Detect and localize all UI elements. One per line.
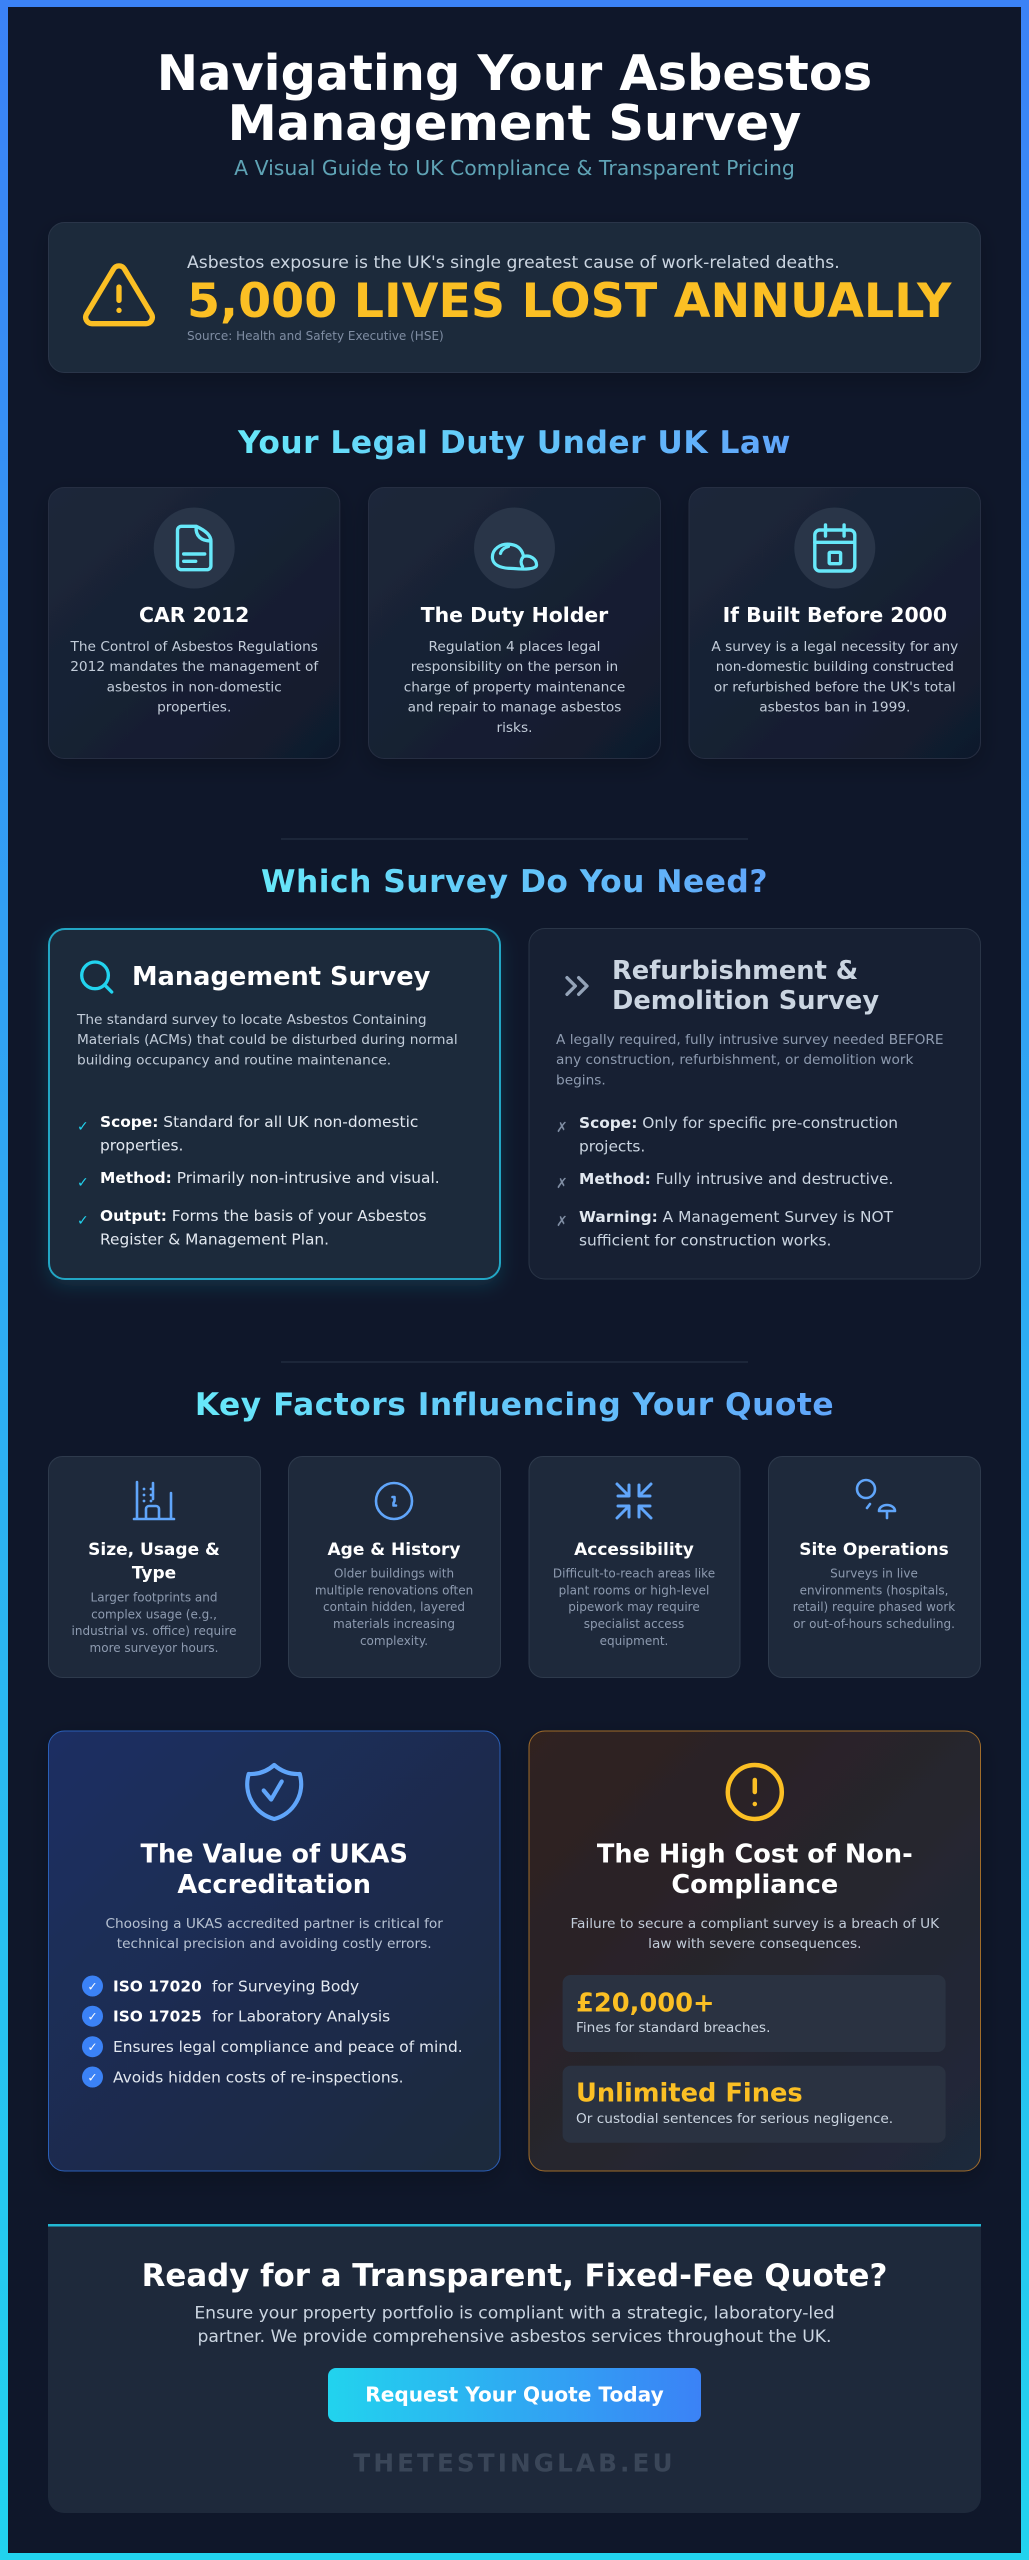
survey feature list: projects. [579,1138,645,1156]
panel: age history [288,1456,500,1678]
card text: or refurbished before the UK's total [714,680,956,696]
card heading: If Built Before 2000 [723,603,947,627]
icon: clock info [376,1483,412,1519]
CTA heading: Ready for a Transparent, Fixed-Fee Quote? [142,2258,887,2294]
panel: alert statistic [48,222,980,372]
factor text [553,1566,715,1648]
card text: asbestos in non-domestic [107,680,282,696]
icon: document [154,508,235,588]
card text: properties. [157,700,231,716]
survey feature list: Scope: Standard for all UK non-domestic [100,1113,418,1131]
CTA text: Ensure your property portfolio is compliant with a strategic, laboratory-led [194,2303,835,2323]
survey feature list: ✓ [77,1213,89,1229]
card text: responsibility on the person in [411,659,618,675]
factor text: or out-of-hours scheduling. [793,1617,955,1631]
panel: size usage type [48,1456,260,1678]
factor text [793,1566,955,1631]
panel text: technical precision and avoiding costly errors. [117,1936,432,1952]
panel heading: Compliance [671,1870,838,1900]
factor text: contain hidden, layered [323,1600,465,1614]
panel text: law with severe consequences. [648,1936,861,1952]
panel heading: The High Cost of Non- [597,1840,913,1870]
icon: inward arrows [617,1484,651,1518]
accreditation checklist: ✓ [87,2010,98,2024]
factor heading: Age & History [328,1540,460,1560]
panel heading [597,1840,913,1900]
panel: accessibility [529,1456,740,1678]
survey description: The standard survey to locate Asbestos Containing [76,1012,427,1028]
survey feature list: properties. [100,1136,183,1154]
title: Management Survey [228,94,801,152]
survey description: building occupancy and routine maintenance. [77,1052,391,1068]
card heading: CAR 2012 [139,603,249,627]
factor text: materials increasing [333,1617,455,1631]
survey feature list: Method: Fully intrusive and destructive. [579,1170,893,1188]
accreditation checklist: ✓ [87,1980,98,1994]
icon: alert circle [728,1765,782,1819]
card text: risks. [497,720,532,736]
icon: calendar [794,508,875,588]
fine box: unlimited [563,2066,946,2143]
card text [711,639,958,716]
survey heading: Refurbishment & [612,956,858,986]
accreditation checklist [82,1976,463,2088]
card text: non-domestic building constructed [716,659,954,675]
accreditation checklist: for Laboratory Analysis [212,2008,390,2026]
CTA button: Request Your Quote Today [365,2383,664,2407]
survey feature list [556,1114,898,1250]
icon: shield check [247,1765,301,1819]
panel heading [141,1840,408,1900]
accreditation checklist: Avoids hidden costs of re-inspections. [113,2068,404,2086]
panel: duty holder [368,488,660,758]
heading: key factors: Key Factors Influencing Your Quote [195,1387,834,1423]
accreditation checklist: ✓ [87,2070,98,2084]
panel: call to action [48,2224,981,2513]
survey feature list: Warning: A Management Survey is NOT [579,1208,894,1226]
card text: and repair to manage asbestos [408,700,621,716]
panel text [105,1916,443,1952]
factor text: equipment. [600,1634,668,1648]
survey description: begins. [556,1072,606,1088]
heading: legal duty: Your Legal Duty Under UK Law [237,425,791,461]
card text: charge of property maintenance [404,680,625,696]
accreditation checklist: Ensures legal compliance and peace of mind. [113,2038,463,2056]
fine box: unlimited: Or custodial sentences for serious negligence. [576,2111,893,2127]
title [157,44,872,152]
panel: site operations [768,1456,980,1678]
factor text: environments (hospitals, [800,1584,948,1598]
factor text: more surveyor hours. [90,1641,218,1655]
panel: built before 2000 [689,488,980,758]
factor text: plant rooms or high-level [559,1584,709,1598]
title: Navigating Your Asbestos [157,44,872,102]
factor text: complex usage (e.g., [91,1608,217,1622]
subtitle: A Visual Guide to UK Compliance & Transparent Pricing [234,156,795,180]
icon: person and umbrella [857,1480,895,1518]
panel: refurbishment survey [529,928,980,1279]
alert intro text: Asbestos exposure is the UK's single greatest cause of work-related deaths. [187,253,840,273]
fine box: standard [563,1975,946,2052]
factor text: multiple renovations often [315,1584,473,1598]
survey heading [612,956,879,1016]
survey feature list: ✓ [77,1175,89,1191]
survey feature list: sufficient for construction works. [579,1232,831,1250]
accreditation checklist: for Surveying Body [212,1978,359,1996]
factor text [315,1566,473,1648]
factor heading: Size, Usage & [88,1540,220,1560]
brand: THETESTINGLAB.EU [353,2449,676,2478]
card text: A survey is a legal necessity for any [711,639,958,655]
card text [404,639,625,736]
factor text: industrial vs. office) require [72,1624,236,1638]
icon: building [134,1482,174,1519]
factor text: complexity. [360,1634,428,1648]
CTA text: partner. We provide comprehensive asbestos services throughout the UK. [197,2327,832,2347]
factor text: Older buildings with [334,1566,454,1580]
panel heading: The Value of UKAS [141,1840,408,1870]
alert source: Source: Health and Safety Executive (HSE) [187,329,444,343]
survey description: A legally required, fully intrusive survey needed BEFORE [556,1032,944,1048]
accreditation checklist: ISO 17025 [113,2008,202,2026]
factor heading: Site Operations [799,1540,949,1560]
factor text: pipework may require [568,1600,700,1614]
panel text: Choosing a UKAS accredited partner is critical for [105,1916,443,1932]
panel: CAR 2012 [48,488,340,758]
CTA text [194,2303,835,2347]
accreditation checklist: ✓ [87,2040,98,2054]
factor heading: Type [132,1564,176,1584]
survey feature list: Scope: Only for specific pre-construction [579,1114,898,1132]
factor text: Surveys in live [830,1566,918,1580]
factor text: specialist access [584,1617,684,1631]
survey description: Materials (ACMs) that could be disturbed during normal [77,1032,458,1048]
icon: hard hat [474,508,555,588]
panel text: Failure to secure a compliant survey is a breach of UK [570,1916,940,1932]
accreditation checklist: ISO 17020 [113,1978,202,1996]
icon: double chevron [567,978,587,994]
panel text [570,1916,940,1952]
survey feature list: Method: Primarily non-intrusive and visual. [100,1169,440,1187]
survey heading: Demolition Survey [612,986,879,1016]
survey feature list: ✗ [556,1120,568,1136]
survey feature list: ✗ [556,1176,568,1192]
card text [70,639,319,716]
survey feature list: Output: Forms the basis of your Asbestos [100,1207,427,1225]
card heading: The Duty Holder [421,603,608,627]
survey feature list: ✗ [556,1214,568,1230]
panel heading: Accreditation [177,1870,371,1900]
alert headline number: 5,000 LIVES LOST ANNUALLY [187,274,952,329]
factor text: Larger footprints and [91,1590,217,1604]
factor text [72,1590,236,1655]
card text: asbestos ban in 1999. [759,700,910,716]
survey feature list: Register & Management Plan. [100,1230,329,1248]
survey description [76,1012,458,1068]
icon: magnifier [82,962,112,992]
factor heading [88,1540,220,1584]
card text: Regulation 4 places legal [429,639,600,655]
heading: which survey: Which Survey Do You Need? [261,864,768,900]
survey feature list [77,1113,440,1248]
survey description: any construction, refurbishment, or demolition work [556,1052,914,1068]
factor text: retail) require phased work [793,1600,955,1614]
survey description [556,1032,944,1088]
panel: UKAS value [48,1731,500,2171]
panel: cost of non-compliance [529,1731,980,2171]
card text: 2012 mandates the management of [70,659,319,675]
icon: warning triangle [86,266,152,324]
card text: The Control of Asbestos Regulations [70,639,318,655]
survey heading: Management Survey [132,962,431,992]
fine box: standard: £20,000+ [576,1989,715,2019]
CTA button [328,2368,701,2422]
fine box: standard: Fines for standard breaches. [576,2020,770,2036]
fine box: unlimited: Unlimited Fines [576,2079,803,2109]
factor heading: Accessibility [574,1540,694,1560]
factor text: Difficult-to-reach areas like [553,1566,715,1580]
survey feature list: ✓ [77,1119,89,1135]
panel: management survey [49,929,500,1279]
